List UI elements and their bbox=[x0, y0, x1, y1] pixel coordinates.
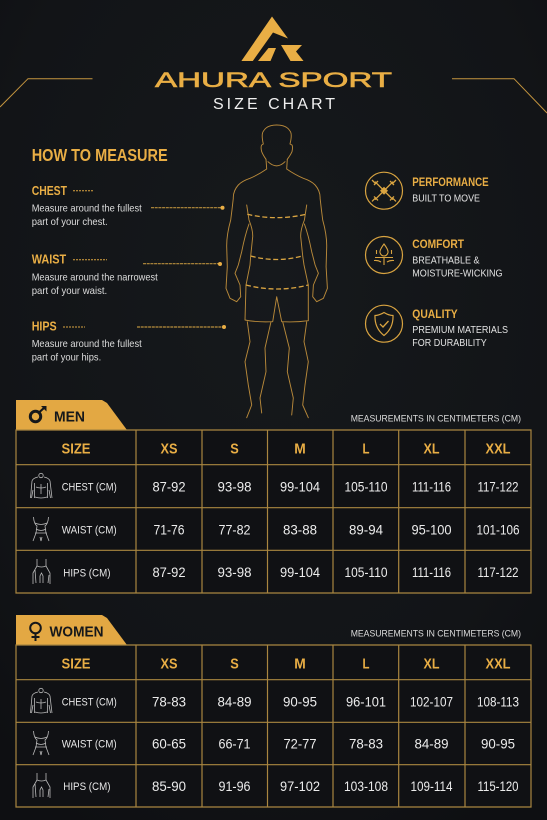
quality feature: PREMIUM MATERIALS bbox=[412, 325, 508, 336]
comfort feature: BREATHABLE & bbox=[412, 255, 480, 266]
hips instruction: part of your hips. bbox=[32, 352, 101, 364]
chest row: 99-104 bbox=[280, 479, 320, 495]
header row: XL bbox=[424, 440, 440, 457]
waist row: 90-95 bbox=[481, 736, 515, 752]
waist instruction: Measure around the narrowest bbox=[32, 271, 158, 283]
hips row: 109-114 bbox=[410, 778, 453, 794]
performance feature bbox=[366, 172, 489, 209]
hips instruction: HIPS bbox=[32, 318, 57, 333]
comfort feature: MOISTURE-WICKING bbox=[412, 268, 503, 279]
performance feature: PERFORMANCE bbox=[412, 175, 489, 189]
waist row: 72-77 bbox=[284, 736, 317, 752]
men tab bbox=[16, 400, 127, 430]
units note: MEASUREMENTS IN CENTIMETERS (CM) bbox=[351, 628, 521, 640]
chest row: 105-110 bbox=[344, 479, 388, 495]
header row bbox=[62, 655, 510, 672]
waist row: 78-83 bbox=[349, 736, 383, 752]
torso and arms bbox=[226, 159, 327, 302]
logo mark bbox=[241, 16, 304, 61]
header row: M bbox=[294, 440, 306, 457]
performance feature: BUILT TO MOVE bbox=[412, 193, 480, 204]
chest row: CHEST (CM) bbox=[62, 482, 117, 494]
hips row: HIPS (CM) bbox=[63, 567, 110, 579]
waist instruction bbox=[32, 252, 222, 297]
waist row bbox=[33, 517, 520, 541]
icon: crossed arrows bbox=[366, 172, 402, 209]
chest row: 93-98 bbox=[218, 479, 252, 495]
hips row: 115-120 bbox=[478, 778, 519, 794]
waist row: 89-94 bbox=[349, 521, 383, 537]
hips instruction bbox=[32, 318, 226, 364]
header row: XS bbox=[160, 440, 178, 457]
header row: XS bbox=[160, 655, 178, 672]
units note: MEASUREMENTS IN CENTIMETERS (CM) bbox=[351, 413, 521, 424]
hips row: 103-108 bbox=[344, 778, 388, 794]
hips measure line bbox=[246, 285, 308, 289]
quality feature bbox=[366, 305, 508, 349]
body outline figure bbox=[226, 125, 327, 418]
icon: moisture drop bbox=[366, 236, 402, 274]
waist row: WAIST (CM) bbox=[62, 739, 117, 751]
waist row: 95-100 bbox=[412, 521, 452, 537]
waist row: 101-106 bbox=[476, 521, 520, 537]
comfort feature bbox=[366, 236, 503, 279]
chest instruction: CHEST bbox=[32, 183, 67, 198]
header row: SIZE bbox=[62, 655, 90, 672]
header row: XXL bbox=[486, 655, 510, 672]
hips row: 117-122 bbox=[478, 564, 519, 580]
chest instruction: part of your chest. bbox=[32, 216, 108, 228]
header row: M bbox=[294, 655, 306, 672]
hips row: HIPS (CM) bbox=[63, 781, 110, 793]
waist row: 60-65 bbox=[152, 736, 186, 752]
chest row: 102-107 bbox=[410, 694, 453, 710]
chest row: 84-89 bbox=[218, 694, 252, 710]
header bbox=[155, 16, 392, 113]
icon: shield check bbox=[366, 305, 402, 342]
chest instruction: Measure around the fullest bbox=[32, 203, 142, 215]
quality feature: QUALITY bbox=[412, 307, 458, 321]
header row: S bbox=[230, 440, 239, 457]
how to measure panel bbox=[32, 145, 226, 364]
heading: how to measure: HOW TO MEASURE bbox=[32, 145, 168, 165]
men tab: MEN bbox=[54, 408, 85, 425]
waist row: 77-82 bbox=[218, 521, 251, 537]
chest row: 90-95 bbox=[283, 694, 317, 710]
men section bbox=[16, 400, 531, 593]
hips row bbox=[33, 559, 519, 584]
chest row: 117-122 bbox=[478, 479, 519, 495]
waist row: WAIST (CM) bbox=[62, 525, 117, 537]
brand name: AHURA SPORT bbox=[155, 69, 392, 92]
comfort feature: COMFORT bbox=[412, 237, 465, 251]
waist row bbox=[33, 731, 515, 755]
hips row: 99-104 bbox=[280, 564, 320, 580]
chest measure line bbox=[247, 214, 306, 218]
chest row bbox=[30, 688, 519, 713]
header row: XXL bbox=[486, 440, 510, 457]
icon: mars symbol bbox=[30, 406, 46, 422]
hips row: 93-98 bbox=[218, 564, 252, 580]
chest row: 78-83 bbox=[152, 694, 186, 710]
header row: S bbox=[230, 655, 239, 672]
hips row: 105-110 bbox=[344, 564, 388, 580]
chest instruction bbox=[32, 183, 225, 228]
hips row: 91-96 bbox=[218, 778, 251, 794]
hips row: 85-90 bbox=[152, 778, 186, 794]
waist row: 71-76 bbox=[154, 521, 185, 537]
women tab bbox=[16, 615, 127, 645]
hips row: 87-92 bbox=[152, 564, 186, 580]
subtitle: SIZE CHART bbox=[213, 96, 335, 113]
women size table bbox=[16, 645, 531, 807]
waist instruction: WAIST bbox=[32, 252, 66, 267]
women section bbox=[16, 615, 531, 807]
quality feature: FOR DURABILITY bbox=[412, 338, 487, 349]
hips row: 111-116 bbox=[412, 564, 451, 580]
shorts bbox=[245, 285, 308, 322]
head and neck bbox=[261, 125, 292, 166]
chest row: 96-101 bbox=[346, 694, 386, 710]
waist row: 84-89 bbox=[414, 736, 449, 752]
hips row: 97-102 bbox=[280, 778, 320, 794]
hips row bbox=[33, 773, 519, 798]
waist row: 66-71 bbox=[218, 736, 251, 752]
chest row: 111-116 bbox=[412, 479, 451, 495]
waist measure line bbox=[251, 256, 302, 260]
header row: L bbox=[362, 440, 370, 457]
waist instruction: part of your waist. bbox=[32, 285, 107, 297]
women tab: WOMEN bbox=[50, 623, 104, 640]
header row bbox=[62, 440, 510, 457]
features panel bbox=[366, 172, 508, 349]
chest row: CHEST (CM) bbox=[62, 697, 117, 709]
header row: SIZE bbox=[62, 440, 90, 457]
chest row bbox=[30, 473, 519, 498]
chest row: 108-113 bbox=[477, 694, 519, 710]
header row: XL bbox=[424, 655, 440, 672]
waist row: 83-88 bbox=[283, 521, 317, 537]
hips instruction: Measure around the fullest bbox=[32, 338, 142, 350]
header row: L bbox=[362, 655, 370, 672]
icon: venus symbol bbox=[30, 623, 41, 641]
legs bbox=[245, 322, 308, 418]
chest row: 87-92 bbox=[152, 479, 186, 495]
men size table bbox=[16, 430, 531, 593]
